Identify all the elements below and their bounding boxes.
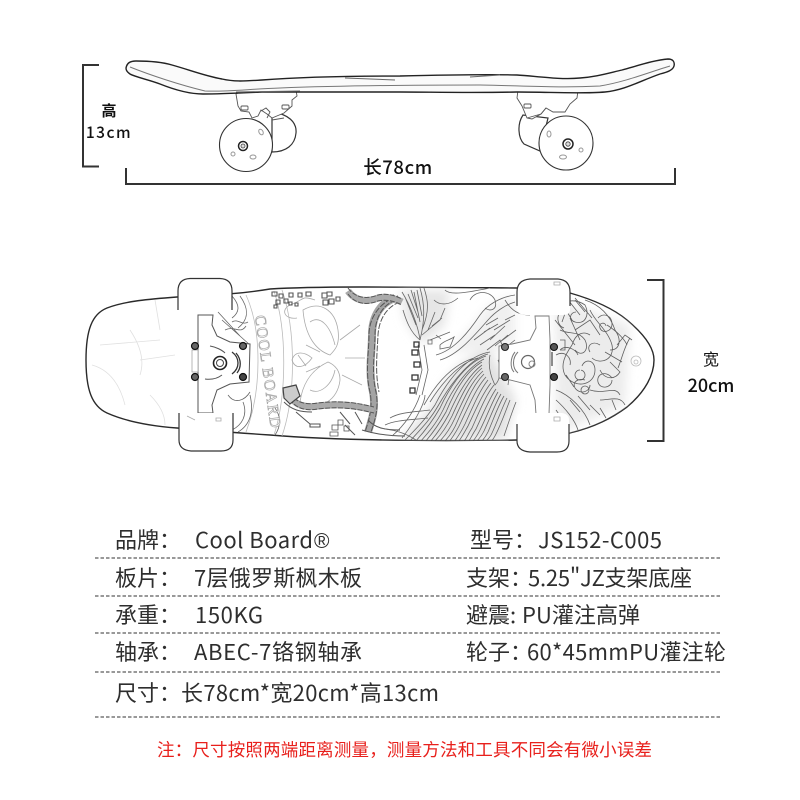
row: deck and truck: 7层俄罗斯枫木板: [194, 561, 362, 593]
row: bearing and wheels: 60*45mmPU灌注轮: [527, 635, 726, 667]
top view: wheels: [178, 278, 570, 452]
artwork: corner swirls: [218, 296, 280, 435]
row: bearing and wheels: ABEC-7铬钢轴承: [194, 635, 362, 667]
width label: [688, 346, 734, 398]
side view: right truck: [517, 90, 578, 119]
row: bearing and wheels: 轮子：: [466, 635, 532, 667]
top view skateboard: [86, 278, 654, 452]
top view: COOL BOARD logo: COOL BOARD: [251, 314, 284, 430]
row: load and damping: 承重：: [115, 598, 181, 630]
row: dimensions: 尺寸：: [115, 676, 181, 708]
width label: 宽: [703, 346, 719, 370]
artwork: pixel dots: [272, 292, 340, 427]
row: dimensions: 长78cm*宽20cm*高13cm: [181, 676, 439, 708]
side view: left front wheel: [220, 118, 272, 172]
artwork: leaf cluster: [402, 288, 530, 395]
artwork: head swirls: [555, 296, 641, 434]
artwork: skull and butterfly: [285, 298, 365, 406]
length label: 长78cm: [363, 154, 433, 180]
side view: right front wheel: [539, 116, 593, 170]
artwork: arcs and logo band: [246, 290, 292, 436]
red footnote: 注：尺寸按照两端距离测量，测量方法和工具不同会有微小误差: [157, 737, 652, 762]
side view: left truck: [236, 90, 297, 120]
height label: [86, 100, 132, 143]
row: brand and model: ®: [314, 530, 330, 553]
top view: left trolley: [192, 315, 250, 413]
infographic canvas: [82, 58, 733, 758]
row: deck and truck: 支架：: [466, 561, 532, 593]
artwork: tone underlay: [400, 290, 630, 440]
width dimension bracket: [647, 280, 664, 441]
length dimension bracket: [126, 168, 675, 184]
side view: rear wheels: [272, 112, 548, 152]
row: load and damping: PU灌注高弹: [522, 598, 640, 630]
row: brand and model: Cool Board: [195, 523, 313, 555]
row: brand and model: [115, 523, 662, 555]
row: load and damping: [115, 598, 640, 630]
artwork: vine: [283, 288, 405, 436]
row: load and damping: 避震: [466, 598, 510, 630]
row: brand and model: JS152-C005: [538, 523, 662, 555]
row: deck and truck: 板片：: [115, 561, 181, 593]
artwork: tail scratches: [92, 300, 175, 425]
height label: 高: [101, 100, 117, 121]
top view: right trolley: [499, 316, 558, 414]
row: bearing and wheels: [115, 635, 726, 667]
row: deck and truck: [115, 561, 692, 593]
side view: deck: [126, 59, 674, 94]
height dimension bracket: [83, 65, 99, 166]
row: load and damping: :: [510, 598, 516, 630]
side view skateboard: [126, 59, 674, 172]
artwork: wing feathers: [380, 340, 516, 442]
row: brand and model: 品牌：: [115, 523, 181, 555]
row: load and damping: 150KG: [195, 598, 263, 630]
width label: 20cm: [688, 372, 734, 398]
top view: deck artwork: [92, 288, 641, 442]
row: brand and model: 型号：: [470, 523, 536, 555]
height label: 13cm: [86, 121, 132, 143]
row: bearing and wheels: 轴承：: [115, 635, 181, 667]
row: deck and truck: 5.25"JZ支架底座: [528, 561, 692, 593]
top view: deck outline: [86, 287, 654, 440]
specification table: [95, 523, 726, 717]
